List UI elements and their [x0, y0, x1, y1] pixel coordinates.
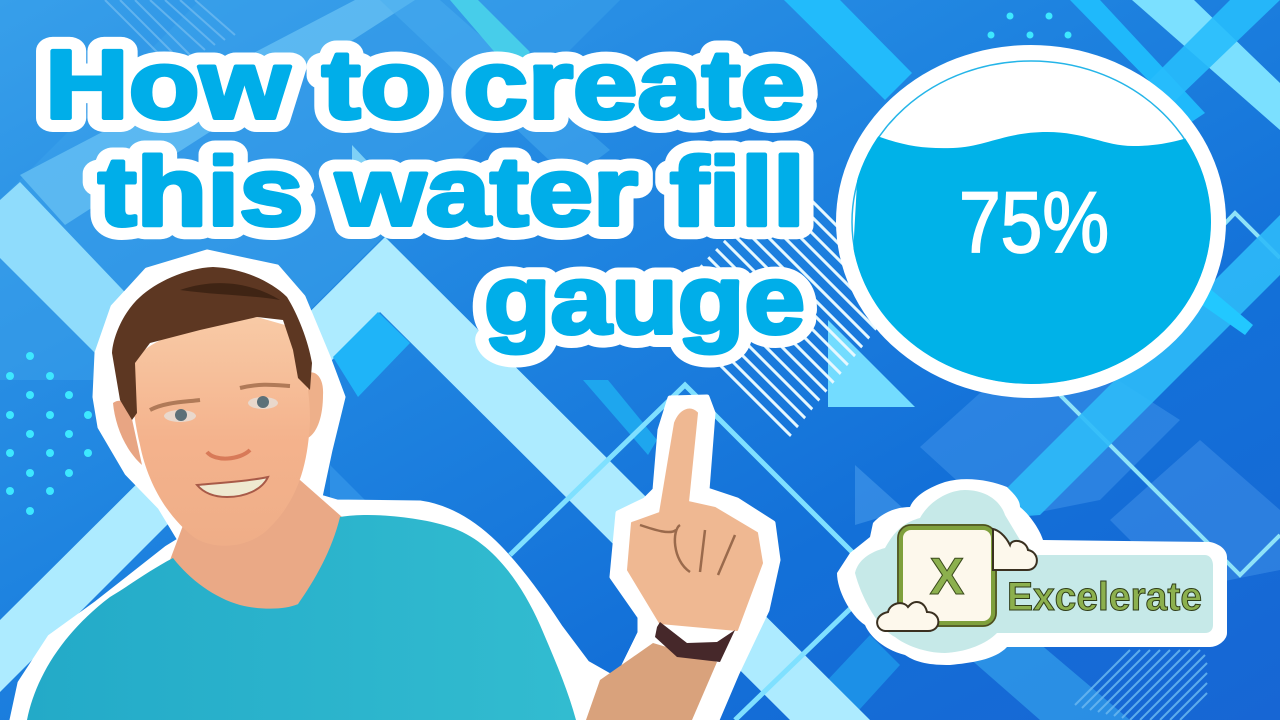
wristband	[655, 622, 735, 662]
forearm	[586, 643, 717, 720]
lower cloud icon	[877, 602, 938, 631]
upper cloud icon	[993, 529, 1037, 570]
large chevron	[0, 237, 870, 720]
title: gauge	[484, 245, 805, 354]
title: How to create	[45, 30, 805, 139]
face	[132, 317, 310, 546]
title: this water fill	[98, 137, 805, 246]
hand outline	[600, 397, 778, 720]
nose	[207, 450, 250, 459]
title: this water fill	[98, 137, 805, 246]
fist	[628, 410, 762, 630]
gauge value: 75%	[959, 175, 1109, 271]
water fill gauge	[836, 45, 1226, 400]
eyes	[164, 410, 196, 422]
presenter	[12, 252, 640, 720]
smile	[197, 477, 268, 497]
eyebrows	[150, 385, 290, 410]
t-shirt	[27, 515, 576, 720]
neck	[170, 480, 342, 612]
logo X: X	[930, 548, 965, 606]
light diagonal bands	[0, 182, 240, 458]
right ear	[308, 372, 323, 438]
left ear	[113, 401, 142, 465]
logo wordmark: Excelerate	[1007, 575, 1202, 619]
title: gauge	[484, 245, 805, 354]
hair	[112, 267, 312, 420]
title	[45, 30, 805, 354]
Excelerate logo	[837, 479, 1227, 665]
title: How to create	[45, 30, 805, 139]
logo tile	[900, 527, 994, 624]
finger creases	[640, 525, 735, 575]
dot grid left	[6, 12, 1072, 515]
outline diamonds	[510, 385, 880, 720]
water	[853, 132, 1211, 384]
gauge ring	[852, 61, 1210, 383]
white cut-out outline	[12, 252, 640, 720]
pointing hand	[586, 397, 778, 720]
logo cloud background	[837, 479, 1227, 665]
hatched stripes	[700, 200, 877, 437]
